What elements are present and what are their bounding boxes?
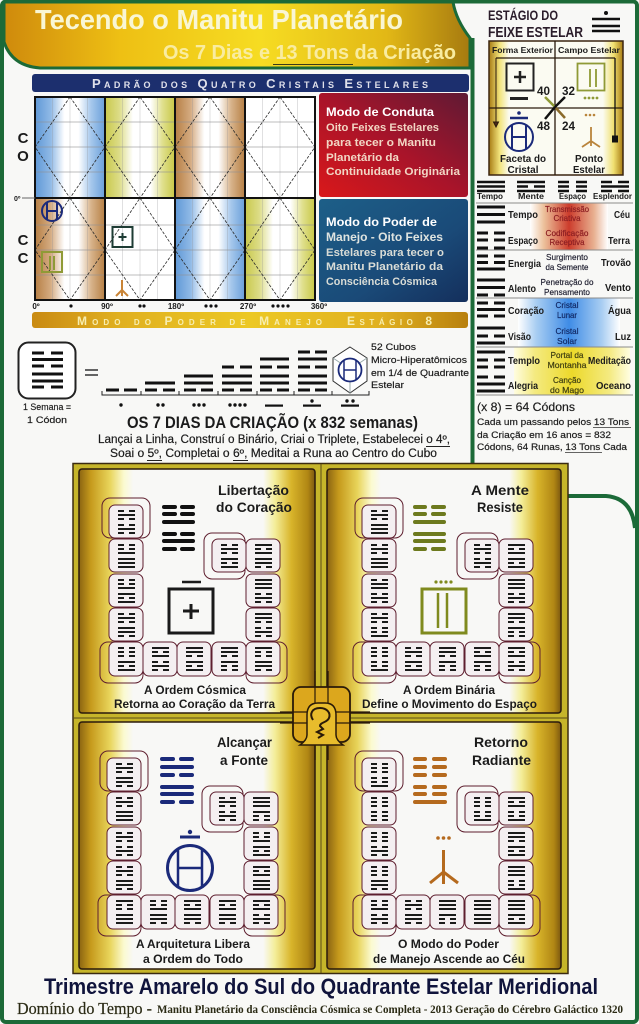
big hexagram <box>164 507 193 549</box>
caption: O Modo do Poder <box>398 937 499 951</box>
caption <box>114 683 275 711</box>
text: 64 codons note <box>477 400 631 453</box>
row labels: Energia <box>508 258 541 270</box>
panel: Modo de Conduta: Oito Feixes Estelares <box>326 122 439 134</box>
icon: tree <box>582 114 600 147</box>
row labels: Tempo <box>508 209 538 221</box>
gold bar: Modo do Poder de Manejo, Estágio 8: Modo do Poder de Manejo <box>77 314 322 328</box>
grid icon: plus square <box>112 227 132 247</box>
heading: Resiste <box>477 499 523 515</box>
table header: trigrams: Mente <box>518 191 544 201</box>
panel: Modo do Poder de Manejo: Consciência Cósmica <box>326 276 438 288</box>
crystal grid chart <box>22 97 315 300</box>
icon: green square <box>578 64 604 99</box>
icon: radial crystal <box>505 111 533 151</box>
row labels: Alento <box>508 283 536 295</box>
crossed arrows <box>545 97 565 119</box>
icon: codon box <box>18 342 76 398</box>
row middle descriptions: Criativa <box>554 213 581 223</box>
text: 64 codons note: Códons, 64 Runas, 13 Tons Cada <box>477 442 628 453</box>
row right labels: Trovão <box>601 257 631 269</box>
row right labels: Terra <box>608 235 630 247</box>
column label: outer form: Forma Exterior <box>492 45 554 55</box>
row right labels: Vento <box>605 282 631 294</box>
big hexagram <box>415 507 444 549</box>
grid icon: green square <box>42 252 62 272</box>
heading: estágio do feixe estelar: ESTÁGIO DO <box>488 7 558 23</box>
footer: time domain: Manitu Planetário da Consciência Cósmica se Completa - 2013 Geração do Cérebro Galáctico 1320 <box>157 1004 623 1016</box>
big hexagram <box>415 759 445 802</box>
panel: Modo do Poder de Manejo: Estelares para tecer o <box>326 247 444 259</box>
icon: plus square <box>506 64 534 98</box>
heading: Radiante <box>472 752 531 768</box>
degree scale: 180º <box>168 302 184 311</box>
caption <box>136 937 250 966</box>
caption: crystal facet: Cristal <box>508 164 539 176</box>
axis label: CC <box>18 232 29 267</box>
axis label: CC: C <box>18 250 29 267</box>
table header: trigrams: Tempo <box>477 191 503 201</box>
panel: A Mente Resiste <box>327 469 561 713</box>
row middle descriptions: Cristal <box>556 326 579 336</box>
row middle descriptions: Codificação <box>546 228 589 238</box>
icon: plus square <box>169 582 213 633</box>
row middle descriptions <box>540 204 594 395</box>
degree scale: 270º <box>240 302 256 311</box>
icon: green square <box>422 580 466 633</box>
row middle descriptions: Surgimento <box>546 252 588 262</box>
row labels: Alegria <box>508 380 538 392</box>
heading: estágio do feixe estelar: FEIXE ESTELAR <box>488 24 583 41</box>
row right labels: Luz <box>615 331 631 343</box>
row right labels: Água <box>608 304 631 317</box>
panel: Modo do Poder de Manejo <box>319 199 468 302</box>
caption: Define o Movimento do Espaço <box>362 697 537 711</box>
subtitle: Os 7 Dias e 13 Tons da Criação <box>163 42 456 64</box>
row middle descriptions: Montanha <box>548 360 587 370</box>
heading: Alcançar <box>217 734 273 750</box>
axis label: CC: C <box>18 232 29 249</box>
text: 64 codons note: (x 8) = 64 Códons <box>477 400 575 414</box>
footer: time domain <box>17 999 623 1018</box>
text: 52 microhyperatomic cubes: Estelar <box>371 380 404 391</box>
panel: Modo de Conduta: Continuidade Originária <box>326 166 461 178</box>
row middle descriptions: Solar <box>557 336 577 346</box>
caption: A Ordem Cósmica <box>144 683 246 697</box>
row middle descriptions: Canção <box>553 375 581 385</box>
degree scale <box>32 302 327 311</box>
gold bar: Modo do Poder de Manejo, Estágio 8: Estágio 8 <box>347 314 432 328</box>
row right labels: Meditação <box>588 355 631 367</box>
text: 52 microhyperatomic cubes: 52 Cubos <box>371 342 416 353</box>
panel: Modo do Poder de Manejo: Manitu Planetário da <box>326 261 444 273</box>
axis label: CO: O <box>17 148 29 165</box>
heading: Retorno <box>474 734 528 750</box>
text: 64 codons note: Cada um passando pelos 13 Tons <box>477 417 629 428</box>
axis label: CO <box>17 130 29 165</box>
row labels: Templo <box>508 355 540 367</box>
caption: Retorna ao Coração da Terra <box>114 697 275 711</box>
caption: a Ordem do Todo <box>143 952 243 966</box>
row middle descriptions: Portal da <box>550 350 584 360</box>
table header: trigrams <box>477 182 633 201</box>
row middle descriptions: Lunar <box>557 310 577 320</box>
icon: stage hexagram <box>592 11 620 31</box>
numbers: 48 <box>537 119 550 133</box>
left arrow <box>494 58 498 127</box>
equals sign <box>85 370 98 375</box>
heading <box>216 482 292 515</box>
grid icon: tree <box>116 280 128 296</box>
track of 13 codons <box>353 498 540 683</box>
panel: stellar beam stage diagram <box>489 41 623 176</box>
caption: A Arquitetura Libera <box>136 937 250 951</box>
panel: Retorno Radiante <box>327 722 561 969</box>
text: creation instructions <box>98 434 450 460</box>
caption: 1 week = 1 codon: 1 Semana = <box>23 402 71 413</box>
panel: Libertação do Coração <box>79 469 315 713</box>
footer: time domain: Domínio do Tempo - <box>17 999 152 1018</box>
track of 13 codons <box>98 751 285 936</box>
degree scale: 90º <box>101 302 113 311</box>
row right labels: Oceano <box>596 380 631 392</box>
colour bands <box>514 203 630 395</box>
text: creation instructions: Lançai a Linha, Construí o Binário, Criai o Triplete, Estabelecei o 4º, <box>98 434 450 446</box>
row middle descriptions: Transmissão <box>545 204 589 214</box>
icon: radial crystal <box>168 830 212 890</box>
icon: hexagon hyperatomic cube <box>333 347 367 393</box>
text: 52 microhyperatomic cubes: Micro-Hiperatômicos <box>371 355 467 366</box>
degree scale: 360º <box>311 302 327 311</box>
title banner <box>4 2 470 68</box>
text: 64 codons note: da Criação em 16 anos = 832 <box>477 430 611 441</box>
caption: 1 week = 1 codon <box>23 402 71 426</box>
column label: stellar field: Campo Estelar <box>558 45 621 55</box>
icon: tree <box>430 836 458 884</box>
numbers <box>537 84 575 133</box>
heading <box>472 734 531 768</box>
heading <box>471 482 529 515</box>
panel: Modo do Poder de Manejo: Manejo - Oito Feixes <box>326 232 443 244</box>
track of 13 codons <box>353 751 540 936</box>
heading: seven days of creation: OS 7 DIAS DA CRIAÇÃO (x 832 semanas) <box>127 412 418 432</box>
row middle descriptions: Cristal <box>556 300 579 310</box>
caption: A Ordem Binária <box>403 683 495 697</box>
gold bar: Modo do Poder de Manejo, Estágio 8 <box>32 312 468 328</box>
numbers: 40 <box>537 84 550 98</box>
panel: Modo de Conduta <box>319 93 468 197</box>
caption: stellar point: Ponto <box>575 153 603 165</box>
heading: a Fonte <box>220 752 268 768</box>
heading: do Coração <box>216 499 292 515</box>
panel: Modo do Poder de Manejo: Modo do Poder de <box>326 217 437 229</box>
row right labels: Céu <box>614 209 630 221</box>
row middle descriptions: Pensamento <box>544 287 590 297</box>
caption: 1 week = 1 codon: 1 Códon <box>27 415 67 426</box>
heading: Libertação <box>218 482 289 498</box>
degree scale: 0º <box>32 302 40 311</box>
caption: de Manejo Ascende ao Céu <box>373 952 525 966</box>
caption <box>362 683 537 711</box>
heading: four stellar crystals pattern: Padrão dos Quatro Cristais Estelares <box>92 76 428 91</box>
central gold seal with question glyph <box>280 671 370 760</box>
caption: crystal facet <box>500 153 546 176</box>
tone markers <box>119 399 359 407</box>
text: creation instructions: Soai o 5º, Completai o 6º, Meditai a Runa ao Centro do Cubo <box>110 448 437 460</box>
chart: seven days line build-up <box>102 352 369 407</box>
table header: trigrams: Espaço <box>559 191 586 201</box>
frame: four quadrants <box>73 464 568 974</box>
panel: Modo de Conduta: para tecer o Manitu <box>326 137 436 149</box>
heading: four stellar crystals pattern <box>32 74 469 92</box>
caption: stellar point <box>573 153 605 176</box>
row labels <box>508 209 544 392</box>
caption: stellar point: Estelar <box>573 164 605 176</box>
row middle descriptions: do Mago <box>550 385 584 395</box>
row trigrams <box>477 207 505 391</box>
row labels: Visão <box>508 331 531 343</box>
row middle descriptions: Receptiva <box>550 237 585 247</box>
track of 13 codons <box>100 498 287 683</box>
row labels: Espaço <box>508 235 538 247</box>
row right labels <box>588 209 631 392</box>
heading <box>217 734 273 768</box>
panel: Modo de Conduta: Planetário da <box>326 152 400 164</box>
axis label: CO: C <box>18 130 29 147</box>
caption <box>373 937 525 966</box>
row middle descriptions: Penetração do <box>540 277 594 287</box>
row labels: Coração <box>508 305 544 317</box>
right arrow <box>612 58 618 142</box>
table: trigram correspondences <box>476 203 633 395</box>
text: 52 microhyperatomic cubes: em 1/4 de Quadrante <box>371 368 469 379</box>
big hexagram <box>162 759 192 802</box>
main title: Tecendo o Manitu Planetário <box>35 4 403 35</box>
degree marker: 0º <box>14 196 21 203</box>
numbers: 32 <box>562 84 575 98</box>
heading: estágio do feixe estelar <box>488 7 620 41</box>
row middle descriptions: da Semente <box>546 262 589 272</box>
numbers: 24 <box>562 119 575 133</box>
table header: trigrams: Esplendor <box>593 191 633 201</box>
panel: Modo de Conduta: Modo de Conduta <box>326 107 435 119</box>
caption: crystal facet: Faceta do <box>500 153 546 165</box>
grid icon: radial crystal <box>42 201 62 221</box>
text: 52 microhyperatomic cubes <box>371 342 469 391</box>
panel: Alcançar a Fonte <box>79 722 315 969</box>
footer title: Trimestre Amarelo do Sul do Quadrante Estelar Meridional <box>44 974 598 999</box>
heading: A Mente <box>471 482 529 498</box>
